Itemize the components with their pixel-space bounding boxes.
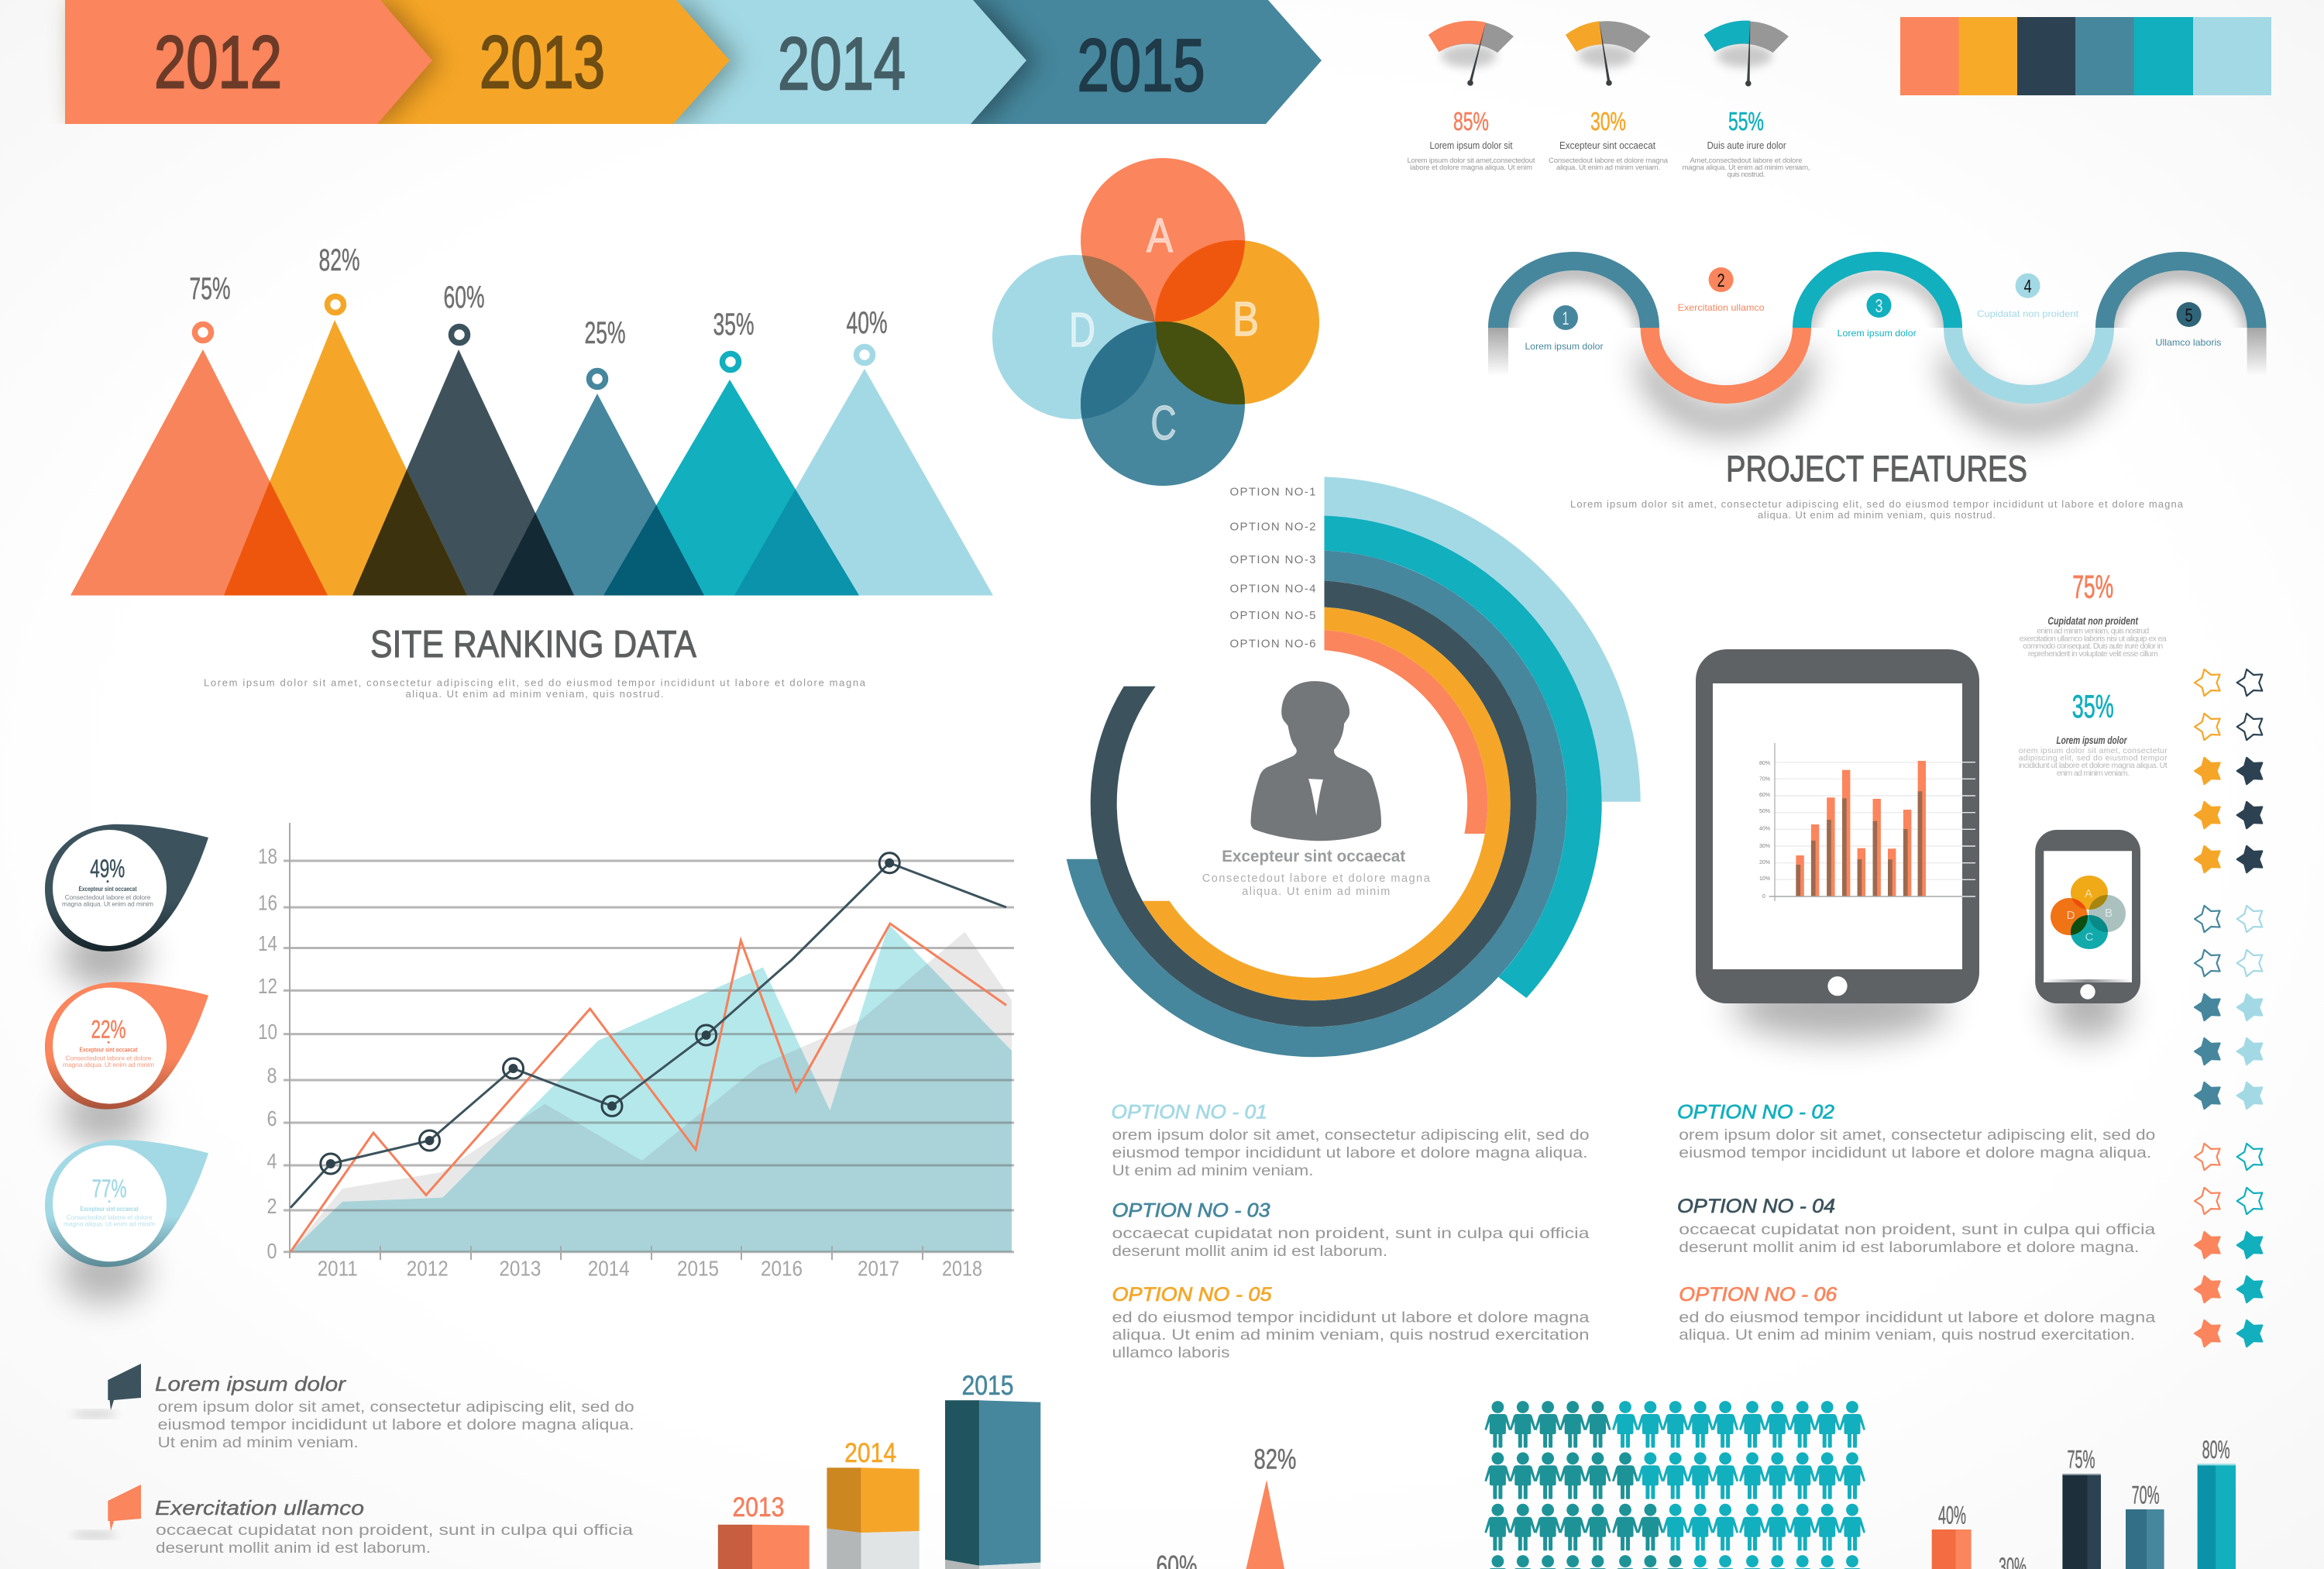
3d bar 2015 — [945, 1371, 1040, 1569]
ribbon segment 2012: 2012 — [154, 21, 282, 104]
stat 75%: Cupidatat non proident — [2047, 615, 2138, 627]
venn letters: D — [1069, 304, 1095, 357]
star rating group 1 — [2195, 669, 2262, 872]
radial bar chart — [1067, 477, 1641, 1057]
teardrop stat 49%: Excepteur sint occaecat — [79, 885, 137, 893]
option 02: eiusmod tempor incididunt ut labore et dolore magna aliqua. — [1679, 1144, 2151, 1161]
wave step 1 — [1525, 305, 1604, 352]
option 05: ullamco laboris — [1112, 1344, 1230, 1361]
3d bar 2014 — [827, 1438, 920, 1569]
x axis labels — [318, 1257, 982, 1281]
x axis labels: 2017 — [858, 1257, 899, 1281]
option 04: deserunt mollit anim id est laborumlabore et dolore magna. — [1679, 1239, 2139, 1256]
tablet bar chart: 40% — [1759, 826, 1770, 832]
wave arc 4 — [1944, 328, 2114, 404]
option 02: orem ipsum dolor sit amet, consectetur adipiscing elit, sed do — [1679, 1127, 2155, 1144]
y axis labels: 6 — [266, 1106, 277, 1130]
mountain percentages: 40% — [846, 306, 888, 340]
people row 1 — [1484, 1401, 1865, 1447]
tablet bar chart: 30% — [1759, 844, 1770, 849]
note: lorem ipsum dolor: Ut enim ad minim veniam. — [158, 1434, 359, 1451]
stat 75%: commodo consequat. Duis aute irure dolor in — [2023, 642, 2163, 651]
stat 35% — [2019, 688, 2168, 778]
bar 40% — [1932, 1502, 1972, 1569]
stat 75%: reprehenderit in voluptate velit esse cillum — [2028, 649, 2158, 659]
ring labels: OPTION NO-6 — [1230, 637, 1315, 651]
ribbon segment 2014: 2014 — [778, 22, 906, 105]
venn diagram — [992, 158, 1319, 486]
centre caption: Consectedout labore et dolore magna — [1202, 872, 1431, 885]
grey area series — [290, 932, 1012, 1252]
tablet bar chart — [1759, 743, 1975, 901]
stat 35%: 35% — [2072, 688, 2114, 724]
ribbon segment 2014 — [673, 0, 1026, 124]
wave timeline: project features — [1488, 252, 2267, 430]
x axis labels: 2018 — [942, 1257, 982, 1281]
option 02: OPTION NO - 02 — [1677, 1102, 1834, 1123]
option 06 — [1679, 1284, 2155, 1344]
teardrop stat 77%: 77% — [91, 1175, 127, 1203]
wave step 4: 4 — [2024, 277, 2032, 298]
people row 3 — [1484, 1504, 1865, 1550]
gauge 85% — [1407, 21, 1535, 172]
site ranking description: aliqua. Ut enim ad minim veniam, quis nostrud. — [406, 688, 663, 700]
heading: site ranking data: SITE RANKING DATA — [370, 624, 696, 666]
wave step 1: 1 — [1562, 308, 1569, 329]
gauge 85%: Lorem ipsum dolor sit — [1430, 139, 1513, 151]
teardrop stat 49%: magna aliqua. Ut enim ad minim — [62, 900, 153, 908]
3d bar 2015: 2015 — [962, 1371, 1013, 1401]
ribbon segment 2012 — [65, 0, 432, 124]
y axis labels: 10 — [258, 1020, 277, 1044]
teardrop stat 49%: Consectedout labore et dolore — [65, 893, 151, 901]
y axis labels: 2 — [266, 1194, 277, 1218]
wave shadows — [1488, 263, 2267, 430]
y axis labels: 14 — [258, 931, 277, 955]
ring option 2 — [1325, 515, 1602, 998]
spike chart: 82% — [1253, 1443, 1297, 1475]
centre caption: aliqua. Ut enim ad minim — [1242, 886, 1390, 898]
option 03: deserunt mollit anim id est laborum. — [1112, 1243, 1387, 1260]
project features description — [1570, 498, 2184, 521]
teardrop stat 77%: Consectedout labore et dolore — [67, 1213, 153, 1221]
mountain percentages — [189, 243, 888, 350]
note: lorem ipsum dolor: Lorem ipsum dolor — [155, 1372, 347, 1395]
gauge 55% — [1683, 21, 1810, 179]
mountain percentages: 35% — [713, 308, 755, 342]
ribbon segment 2015: 2015 — [1077, 24, 1205, 107]
site ranking description: Lorem ipsum dolor sit amet, consectetur adipiscing elit, sed do eiusmod tempor incididunt ut labore et dolore magna — [204, 677, 866, 688]
project features description: Lorem ipsum dolor sit amet, consectetur adipiscing elit, sed do eiusmod tempor incididunt ut labore et dolore magna — [1570, 498, 2184, 510]
icon: dark flag — [71, 1364, 141, 1416]
stat 35%: Lorem ipsum dolor — [2056, 735, 2127, 746]
coral line series — [290, 924, 1006, 1252]
y axis labels: 8 — [266, 1064, 277, 1088]
project features description: aliqua. Ut enim ad minim veniam, quis nostrud. — [1758, 509, 1996, 521]
mountain chart: site ranking — [70, 243, 993, 595]
bar 70%: 70% — [2132, 1481, 2160, 1509]
gauge 30% — [1549, 21, 1669, 172]
note: lorem ipsum dolor — [71, 1364, 634, 1451]
people pictogram — [1484, 1401, 1865, 1569]
bar 80% — [2198, 1436, 2236, 1569]
wave step 3 — [1838, 293, 1917, 339]
gauge 30%: 30% — [1590, 107, 1626, 136]
teardrop stat 22%: magna aliqua. Ut enim ad minim — [63, 1061, 154, 1068]
option 01: eiusmod tempor incididunt ut labore et dolore magna aliqua. — [1112, 1144, 1588, 1161]
centre caption: Excepteur sint occaecat — [1222, 848, 1405, 865]
option 06: OPTION NO - 06 — [1679, 1284, 1837, 1306]
bar 75% — [2062, 1446, 2101, 1569]
gauge 30%: aliqua. Ut enim ad minim veniam. — [1556, 163, 1660, 172]
gauge 85%: labore et dolore magna aliqua. Ut enim — [1410, 163, 1532, 172]
centre caption — [1202, 848, 1431, 898]
phone venn: D — [2067, 909, 2075, 922]
x axis labels: 2014 — [588, 1257, 630, 1281]
y axis labels: 12 — [258, 974, 277, 998]
wave arc 1 — [1488, 252, 1659, 328]
line and area chart — [258, 823, 1014, 1281]
tablet bar chart: 60% — [1759, 793, 1770, 798]
wave step 3: Lorem ipsum dolor — [1838, 328, 1917, 339]
mountain percentages: 60% — [443, 280, 485, 315]
y axis labels: 4 — [266, 1149, 277, 1173]
ribbon segment 2013: 2013 — [480, 21, 605, 104]
gauge 85%: 85% — [1453, 107, 1489, 136]
gauge 85%: Lorem ipsum dolor sit amet,consectedout — [1407, 157, 1535, 165]
stat 75%: enim ad minim veniam, quis nostrud — [2037, 626, 2149, 635]
wave step 5: Ullamco laboris — [2155, 337, 2222, 348]
option 01 — [1111, 1102, 1590, 1179]
wave step 1: Lorem ipsum dolor — [1525, 341, 1604, 352]
two-tone bar chart — [1932, 1436, 2236, 1569]
ring option 3 — [1067, 550, 1567, 1057]
gauge 30%: Excepteur sint occaecat — [1559, 139, 1655, 151]
mountain percentages: 25% — [584, 316, 626, 350]
stat 35%: incididunt ut labore et dolore magna aliqua. Ut — [2019, 761, 2168, 770]
venn letters — [1069, 209, 1259, 450]
option 03: OPTION NO - 03 — [1112, 1200, 1270, 1222]
ring labels: OPTION NO-4 — [1230, 583, 1315, 595]
gauge 55%: magna aliqua. Ut enim ad minim veniam, — [1683, 163, 1810, 172]
x axis labels: 2012 — [407, 1257, 449, 1281]
gauge 30%: Consectedout labore et dolore magna — [1549, 157, 1669, 165]
y axis labels: 16 — [258, 891, 277, 915]
3d bar 2013 — [718, 1492, 810, 1569]
option 04 — [1677, 1196, 2155, 1256]
teardrop stat 77%: Excepteur sint occaecat — [81, 1205, 139, 1213]
stat 35%: adipiscing elit, sed do eiusmod tempor — [2019, 753, 2168, 762]
spike chart — [1156, 1443, 1297, 1569]
option 06: ed do eiusmod tempor incididunt ut labore et dolore magna — [1679, 1309, 2155, 1326]
people row 2 — [1484, 1452, 1865, 1499]
option 03 — [1112, 1200, 1590, 1260]
3d bar chart — [718, 1371, 1040, 1569]
gauge 55%: Amet,consectedout labore et dolore — [1690, 157, 1802, 165]
teardrop stat 49% — [45, 824, 208, 988]
star rating group 2 — [2195, 906, 2262, 1109]
option 05: OPTION NO - 05 — [1112, 1284, 1272, 1306]
wave arc 3 — [1793, 252, 1962, 328]
stat 75%: exercitation ullamco laboris nisi ut aliquip ex ea — [2020, 634, 2167, 643]
ribbon segment 2013 — [74, 0, 730, 124]
gauge 55%: quis nostrud. — [1728, 170, 1765, 179]
wave step 2: 2 — [1717, 270, 1725, 291]
bar 40%: 40% — [1938, 1502, 1966, 1529]
teardrop stat 77%: magna aliqua. Ut enim ad minim — [64, 1220, 155, 1228]
teardrop stat 49%: 49% — [90, 855, 125, 883]
ribbon segment 2015 — [971, 0, 1322, 124]
3d bar 2013: 2013 — [733, 1492, 784, 1523]
wave arc 5 — [2095, 252, 2267, 328]
teardrop stat 22%: 22% — [91, 1016, 125, 1044]
option 04: occaecat cupidatat non proident, sunt in culpa qui officia — [1679, 1221, 2155, 1238]
option 05: aliqua. Ut enim ad minim veniam, quis nostrud exercitation — [1112, 1326, 1590, 1344]
y axis labels: 0 — [266, 1239, 277, 1263]
stat 35%: enim ad minim veniam. — [2057, 769, 2130, 778]
wave step 5 — [2155, 302, 2222, 348]
note: lorem ipsum dolor: orem ipsum dolor sit amet, consectetur adipiscing elit, sed do — [158, 1399, 634, 1416]
ring labels — [1230, 485, 1315, 651]
smartphone — [2035, 830, 2140, 1040]
timeline ribbon — [65, 0, 1322, 124]
ring option 4 — [1091, 581, 1537, 1027]
phone venn: C — [2085, 931, 2094, 944]
colour palette — [1900, 17, 2271, 95]
x axis labels: 2013 — [499, 1257, 541, 1281]
note: exercitation ullamco: occaecat cupidatat non proident, sunt in culpa qui officia — [156, 1522, 633, 1539]
ring option 6 — [1325, 630, 1487, 834]
mountain percentages: 82% — [319, 243, 359, 277]
stat 75% — [2020, 569, 2167, 659]
site ranking description — [204, 677, 866, 700]
tablet bar chart: 0 — [1762, 894, 1765, 900]
gauge 55%: 55% — [1728, 107, 1764, 136]
tablet bar chart: 80% — [1759, 761, 1770, 766]
ring labels: OPTION NO-5 — [1230, 609, 1315, 622]
venn letters: A — [1147, 209, 1174, 263]
heading: project features: PROJECT FEATURES — [1726, 448, 2027, 489]
bar 75%: 75% — [2067, 1446, 2095, 1474]
mountain percentages: 75% — [189, 272, 231, 306]
star rating group 3 — [2195, 1144, 2262, 1347]
option 01: orem ipsum dolor sit amet, consectetur adipiscing elit, sed do — [1112, 1127, 1590, 1144]
ring labels: OPTION NO-1 — [1230, 485, 1315, 499]
tablet bar chart: 70% — [1759, 776, 1770, 783]
wave step 4 — [1977, 274, 2079, 319]
wave step 2: Exercitation ullamco — [1678, 302, 1765, 313]
icon: coral flag — [71, 1485, 141, 1537]
x axis labels: 2015 — [677, 1257, 719, 1281]
phone venn: B — [2105, 907, 2113, 920]
wave arc 2 — [1641, 328, 1811, 404]
3d bar 2014: 2014 — [844, 1438, 896, 1468]
wave step 3: 3 — [1875, 296, 1882, 317]
option 01: OPTION NO - 01 — [1111, 1102, 1267, 1123]
y axis labels: 18 — [258, 845, 277, 869]
wave step 2 — [1678, 267, 1765, 313]
stat 35%: orem ipsum dolor sit amet, consectetur — [2019, 746, 2168, 755]
bar 80%: 80% — [2202, 1436, 2230, 1464]
option 05: ed do eiusmod tempor incididunt ut labore et dolore magna — [1112, 1309, 1590, 1326]
line markers — [321, 853, 899, 1174]
phone venn — [2051, 876, 2126, 949]
icon: person — [1251, 681, 1381, 841]
option text blocks — [1111, 1102, 2155, 1361]
stat 75%: 75% — [2072, 569, 2113, 605]
teardrop stat 22% — [45, 982, 208, 1146]
option 01: Ut enim ad minim veniam. — [1112, 1162, 1314, 1179]
note: exercitation ullamco: Exercitation ullamco — [155, 1496, 364, 1519]
tablet — [1696, 649, 1979, 1040]
tablet bar chart: 50% — [1759, 809, 1770, 814]
wave step 5: 5 — [2185, 305, 2193, 326]
x axis labels: 2011 — [318, 1257, 358, 1281]
y axis labels — [258, 845, 277, 1263]
teardrop stat 22%: Excepteur sint occaecat — [79, 1046, 138, 1054]
x axis labels: 2016 — [761, 1257, 803, 1281]
venn letters: C — [1151, 397, 1176, 450]
dark line series — [290, 863, 1006, 1208]
bar 70% — [2126, 1481, 2164, 1569]
teardrop stat 77% — [45, 1140, 208, 1303]
option 05 — [1112, 1284, 1590, 1361]
cyan area series — [290, 924, 1012, 1252]
option 06: aliqua. Ut enim ad minim veniam, quis nostrud exercitation. — [1679, 1326, 2135, 1344]
people row 4 — [1484, 1555, 1865, 1569]
tablet bar chart: 20% — [1759, 860, 1770, 865]
note: exercitation ullamco: deserunt mollit anim id est laborum. — [156, 1540, 431, 1557]
option 03: occaecat cupidatat non proident, sunt in culpa qui officia — [1112, 1225, 1590, 1242]
option 02 — [1677, 1102, 2155, 1161]
venn letters: B — [1232, 293, 1259, 346]
phone venn: A — [2085, 887, 2092, 900]
note: lorem ipsum dolor: eiusmod tempor incididunt ut labore et dolore magna aliqua. — [158, 1416, 634, 1433]
ring labels: OPTION NO-2 — [1230, 521, 1315, 533]
teardrop stat 22%: Consectedout labore et dolore — [65, 1055, 152, 1062]
gauge 55%: Duis aute irure dolor — [1707, 139, 1786, 151]
wave step 4: Cupidatat non proident — [1977, 308, 2079, 319]
ring labels: OPTION NO-3 — [1230, 553, 1315, 566]
ring option 1 — [1325, 477, 1641, 802]
option 04: OPTION NO - 04 — [1677, 1196, 1835, 1217]
tablet bar chart: 10% — [1759, 876, 1770, 882]
note: exercitation ullamco — [71, 1485, 633, 1557]
mountain markers — [195, 296, 872, 387]
ring option 5 — [1143, 607, 1511, 1000]
